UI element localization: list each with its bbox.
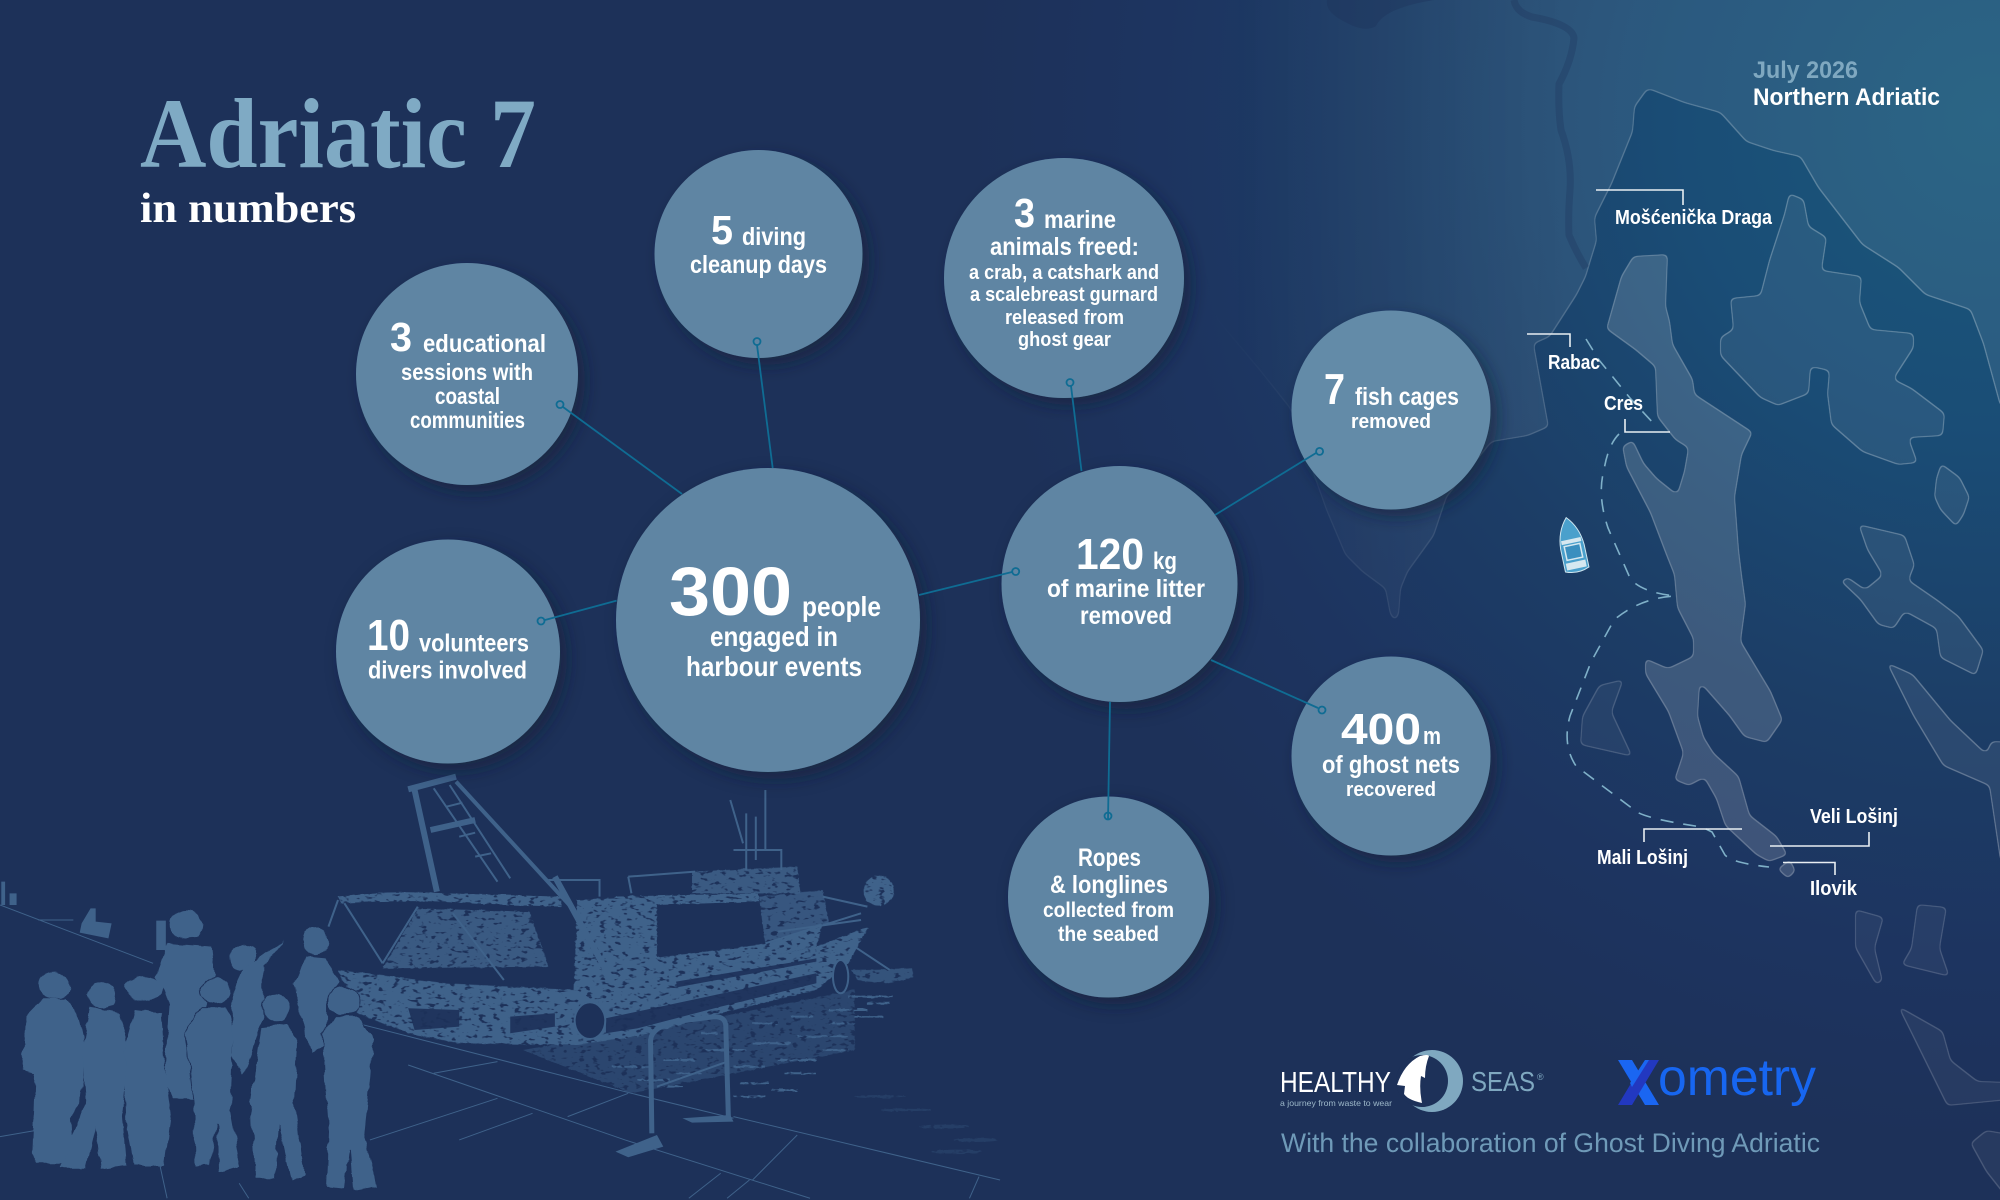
land: mainland and Istria: [1277, 0, 2000, 618]
bubble: 5 diving cleanup days: [654, 150, 862, 358]
place label: Cres: Cres: [1604, 393, 1643, 415]
person 5: [185, 978, 241, 1173]
bubble: 3 educational sessions: [356, 263, 578, 485]
logo: Healthy Seas: SEAS: [1471, 1066, 1535, 1097]
bubble: 3 marine animals freed: 3: [1014, 190, 1035, 236]
bubble: 5 diving cleanup days: 5: [711, 207, 733, 253]
person 8: [295, 927, 339, 1052]
bubble: 3 marine animals freed: a crab, a catshark and: [969, 262, 1159, 284]
footer credit: With the collaboration of Ghost Diving Adriatic: [1281, 1128, 1820, 1158]
island: Olib: [1901, 904, 1950, 977]
route: dashed voyage path: [1567, 339, 1769, 867]
bubble: 10 volunteers divers: divers involved: [368, 656, 527, 684]
hull dark details and dock handrail: [1, 882, 848, 1157]
bubble: 10 volunteers divers: 10: [367, 611, 410, 660]
dock handrail: [651, 1017, 728, 1133]
hull dark stripes: [408, 958, 816, 1033]
place label: Ilovik: Ilovik: [1810, 878, 1858, 900]
person 9: [322, 986, 378, 1191]
bubble: 300 people engaged: people: [802, 591, 881, 622]
handrail bases: [615, 1115, 733, 1157]
bubble: 300 people engaged: harbour events: [686, 651, 862, 682]
bubble: 3 marine animals freed: released from: [1005, 307, 1124, 329]
person 3: [124, 977, 171, 1165]
boat upper cabin band: [612, 893, 759, 905]
bubble: 400 m ghost nets: [1292, 656, 1490, 856]
island: southern corner: [1970, 1130, 2000, 1200]
person 1: [22, 972, 84, 1163]
bubble: 3 educational sessions: educational: [423, 330, 546, 358]
boat hull: [338, 927, 869, 1045]
date: July 2026: [1753, 57, 1858, 84]
boat rigging and mast: [328, 777, 890, 982]
bubble: ropes and longlines: [1008, 796, 1209, 998]
island: Ilovik: [1777, 859, 1796, 879]
island: Plavnik: [1934, 463, 1970, 527]
bubble: 3 educational sessions: coastal: [435, 383, 500, 409]
bubble: 7 fish cages: fish cages: [1355, 383, 1459, 411]
bubble: 10 volunteers divers: [336, 540, 560, 764]
person 2: [61, 982, 129, 1168]
bubble: ropes and longlines: Ropes: [1078, 844, 1141, 872]
bubble: 300 people engaged: [616, 468, 920, 772]
bubble: 3 marine animals freed: a scalebreast gurnard: [970, 284, 1158, 306]
boat aft cabin: [383, 908, 549, 968]
crowd of people: [22, 910, 378, 1191]
logo: Healthy Seas: ®: [1537, 1072, 1544, 1082]
bubble: 3 marine animals freed: [944, 158, 1184, 398]
bubble: 3 marine animals freed: ghost gear: [1018, 329, 1111, 351]
boat panel band under window: [660, 923, 823, 977]
icon: boat: [1554, 515, 1589, 574]
bubble: 7 fish cages: [1292, 310, 1490, 510]
faint ripples: [855, 1095, 998, 1154]
bubble: 400 m ghost nets: recovered: [1346, 779, 1436, 801]
illustration: fishing boat and crowd on the harbour: [0, 777, 1000, 1198]
panel: map of the northern Adriatic: [1277, 0, 2000, 1190]
boat wheelhouse: [759, 890, 829, 945]
bubble: 3 marine animals freed: animals freed:: [990, 233, 1139, 261]
island: Silba: [1855, 909, 1884, 985]
land: dark bay at top: [1327, 0, 1434, 29]
bubble: 3 marine animals freed: marine: [1044, 206, 1116, 234]
region: Northern Adriatic: [1753, 84, 1940, 111]
water wash: [523, 990, 855, 1093]
person 6: [229, 940, 284, 1075]
bubble: 300 people engaged: engaged in: [710, 621, 838, 652]
hull fender: [575, 1002, 605, 1039]
far bollards: [1, 882, 166, 950]
bubble: 5 diving cleanup days: cleanup days: [690, 251, 827, 279]
place label: Mali Lošinj: Mali Lošinj: [1597, 847, 1688, 869]
island: Cres and Lošinj: [1606, 254, 1788, 862]
bubble: 5 diving cleanup days: diving: [742, 223, 806, 251]
bubble: 120 kg marine litter: kg: [1153, 548, 1177, 575]
person 7: [251, 993, 305, 1181]
boat bow buoys: [864, 876, 894, 906]
bubble: 120 kg marine litter: 120: [1076, 530, 1144, 579]
bubble: 400 m ghost nets: 400: [1341, 705, 1421, 754]
bubble: 120 kg marine litter: removed: [1080, 602, 1172, 630]
callout lines for place names: [1527, 190, 1869, 875]
island: Unije: [1580, 679, 1633, 757]
bubble: 3 educational sessions: communities: [410, 407, 525, 433]
island: Pag: [1886, 662, 2000, 900]
title: Adriatic 7: [140, 78, 536, 189]
bubble: 120 kg marine litter: [1002, 466, 1238, 702]
subtitle: in numbers: [140, 186, 356, 232]
boat canopy: [338, 892, 561, 907]
bubble: ropes and longlines: collected from: [1043, 899, 1174, 922]
bubble: ropes and longlines: the seabed: [1058, 923, 1159, 946]
island: Dugi Otok north: [1897, 1005, 2000, 1106]
dinghy: [851, 968, 913, 983]
island: Krk: [1720, 193, 1945, 465]
person 4: [156, 910, 215, 1098]
bubble: 3 educational sessions: sessions with: [401, 359, 533, 385]
bow fender: [833, 960, 848, 993]
bubble: 7 fish cages: removed: [1351, 411, 1431, 433]
water reflections: [612, 997, 893, 1097]
bubble: ropes and longlines: & longlines: [1050, 871, 1168, 899]
dock lines: [0, 905, 1000, 1198]
bubble: 400 m ghost nets: of ghost nets: [1322, 751, 1460, 779]
boat, rigging and water: [338, 867, 998, 1154]
logo: Healthy Seas: a journey from waste to wear: [1280, 1098, 1392, 1108]
bubble: 400 m ghost nets: m: [1423, 723, 1441, 750]
bubble: 3 educational sessions: 3: [390, 314, 412, 360]
bubble: 10 volunteers divers: volunteers: [419, 630, 529, 658]
logo: Xometry: ometry: [1658, 1049, 1816, 1107]
island: Rab: [1840, 524, 1984, 676]
logo: Healthy Seas: HEALTHY: [1280, 1067, 1391, 1099]
bubble: 120 kg marine litter: of marine litter: [1047, 575, 1205, 603]
boat bridge: [692, 867, 800, 893]
bubble: 7 fish cages: 7: [1324, 365, 1345, 414]
place label: Mošćenička Draga: Mošćenička Draga: [1615, 207, 1773, 229]
logo: Healthy Seas: [1280, 1050, 1544, 1112]
bubble: 300 people engaged: 300: [669, 553, 792, 630]
place label: Rabac: Rabac: [1548, 352, 1600, 374]
land: Istria channel: [1514, 0, 1586, 268]
boat central cabin: [574, 897, 676, 990]
place label: Veli Lošinj: Veli Lošinj: [1810, 806, 1898, 828]
connector lines between bubbles: [538, 338, 1326, 820]
